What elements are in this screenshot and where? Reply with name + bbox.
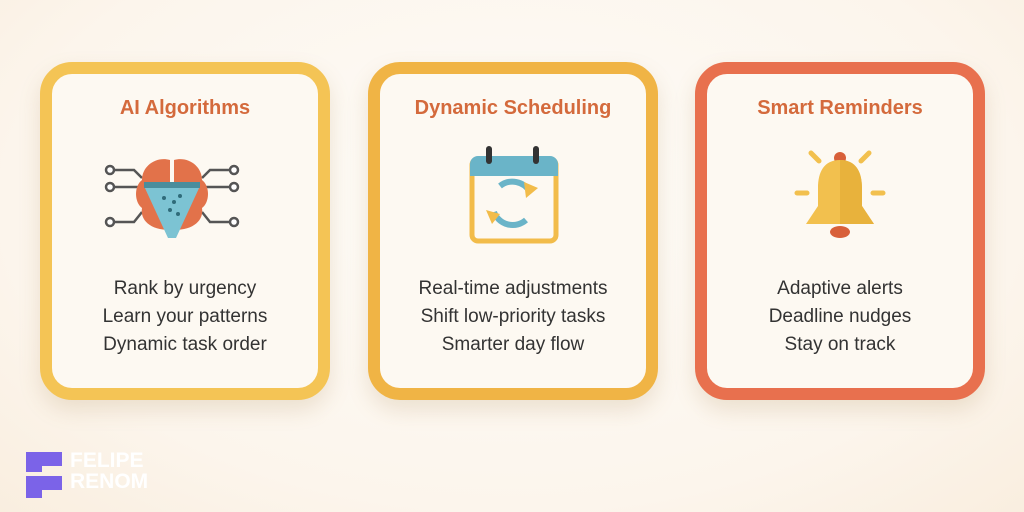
heading: Dynamic Scheduling: Dynamic Scheduling [415,97,611,119]
text: features [418,278,608,355]
text: features [769,278,911,355]
text: features: Stay on track [785,334,895,355]
icon: calendar refresh [470,146,558,244]
text: features: Learn your patterns [103,306,267,327]
text: features: Deadline nudges [769,306,911,327]
icon: bell [794,150,886,238]
text: features [103,278,267,355]
text: features: Real-time adjustments [418,278,608,299]
icon: brain with funnel [104,159,240,238]
panel: Dynamic Scheduling [368,62,658,400]
text: features: Smarter day flow [442,334,584,355]
text: features: Adaptive alerts [777,278,903,299]
panel: Smart Reminders [695,62,985,400]
logo [26,449,148,498]
logo: FELIPE [70,449,144,472]
text: features: Rank by urgency [114,278,256,299]
heading: Smart Reminders: Smart Reminders [757,97,923,119]
heading: AI Algorithms: AI Algorithms [120,97,250,119]
logo: RENOM [70,470,148,493]
panel: AI Algorithms [40,62,330,400]
text: features: Shift low-priority tasks [421,306,605,327]
text: features: Dynamic task order [103,334,267,355]
